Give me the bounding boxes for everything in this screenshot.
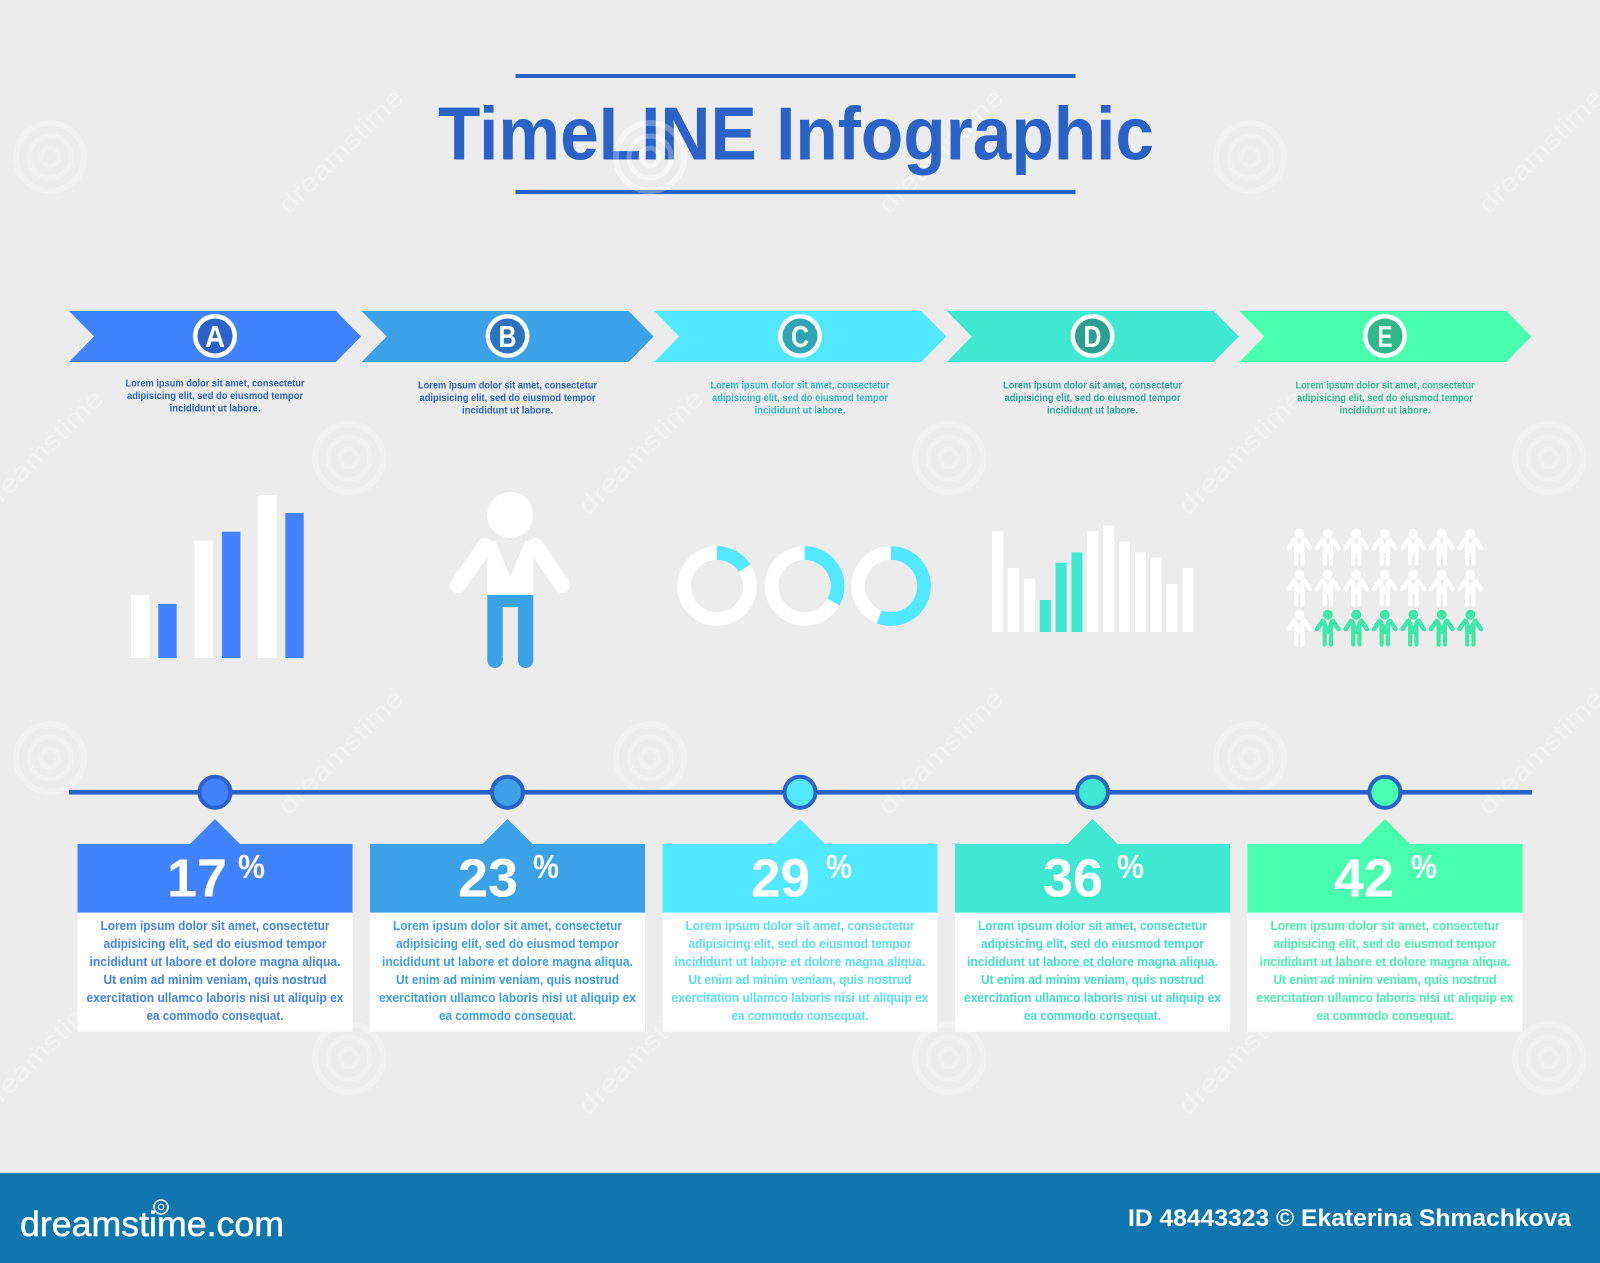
- step B: arrow and caption: incididunt ut labore.: [462, 406, 553, 416]
- panel: 29%: adipisicing elit, sed do eiusmod tempor: [688, 937, 912, 951]
- step A: arrow and caption: adipisicing elit, sed do eiusmod tempor: [127, 391, 303, 402]
- step A: arrow and caption: Lorem ipsum dolor sit amet, consectetur: [126, 378, 305, 390]
- step B: arrow and caption: [362, 311, 654, 416]
- footer logo: dreamstime.com: [20, 1205, 284, 1244]
- watermark pattern: dreamstime: [1472, 82, 1600, 220]
- panel: 29%: incididunt ut labore et dolore magna aliqua.: [674, 955, 926, 969]
- footer bar: [0, 1173, 1600, 1263]
- pictogram grid of people: [1289, 529, 1481, 646]
- panel: 17%: adipisicing elit, sed do eiusmod tempor: [104, 937, 327, 951]
- panel: 17%: %: [238, 848, 265, 885]
- watermark pattern: dreamstime: [872, 683, 1010, 821]
- panel: 23%: incididunt ut labore et dolore magna aliqua.: [382, 955, 633, 969]
- panel: 42%: ea commodo consequat.: [1316, 1009, 1454, 1023]
- step C: arrow and caption: incididunt ut labore.: [754, 406, 846, 416]
- panel: 42%: Lorem ipsum dolor sit amet, consectetur: [1270, 919, 1500, 933]
- panel: 29%: ea commodo consequat.: [732, 1009, 868, 1023]
- icon: person figure: [458, 492, 562, 668]
- panel: 36%: exercitation ullamco laboris nisi ut aliquip ex: [964, 991, 1221, 1005]
- panel: 29%: exercitation ullamco laboris nisi ut aliquip ex: [672, 991, 929, 1005]
- step D: arrow and caption: incididunt ut labore.: [1047, 406, 1138, 416]
- timeline line with nodes: [69, 777, 1532, 808]
- panel: 17%: Lorem ipsum dolor sit amet, consectetur: [100, 919, 330, 933]
- step E: arrow and caption: incididunt ut labore.: [1340, 406, 1431, 416]
- panel: 23%: exercitation ullamco laboris nisi ut aliquip ex: [379, 991, 636, 1005]
- panel: 23%: adipisicing elit, sed do eiusmod tempor: [396, 937, 619, 951]
- step D: arrow and caption: adipisicing elit, sed do eiusmod tempor: [1004, 393, 1181, 404]
- panel: 42%: Ut enim ad minim veniam, quis nostrud: [1274, 973, 1496, 987]
- watermark pattern: dreamstime: [1472, 683, 1600, 821]
- panel: 36%: Lorem ipsum dolor sit amet, consectetur: [978, 919, 1207, 933]
- panel: 36%: [955, 819, 1230, 1032]
- watermark pattern: dreamstime: [572, 983, 710, 1121]
- panel: 29%: %: [826, 848, 852, 885]
- panel: 36%: 36: [1043, 849, 1103, 909]
- panel: 23%: [370, 819, 645, 1032]
- step E: arrow and caption: adipisicing elit, sed do eiusmod tempor: [1297, 393, 1473, 404]
- step B: arrow and caption: Lorem ipsum dolor sit amet, consectetur: [418, 380, 597, 392]
- watermark pattern: dreamstime: [572, 383, 710, 521]
- step C: arrow and caption: [654, 311, 946, 416]
- step D: arrow and caption: D: [1084, 319, 1102, 354]
- donut charts: [684, 553, 924, 619]
- panel: 42%: adipisicing elit, sed do eiusmod tempor: [1274, 937, 1497, 951]
- panel: 36%: incididunt ut labore et dolore magna aliqua.: [967, 955, 1218, 969]
- title: TimeLINE Infographic: [438, 92, 1154, 176]
- title: [438, 74, 1154, 194]
- watermark pattern: dreamstime: [1172, 383, 1310, 521]
- step B: arrow and caption: B: [498, 319, 516, 354]
- panel: 17%: ea commodo consequat.: [146, 1009, 284, 1023]
- step E: arrow and caption: [1239, 311, 1531, 416]
- panel: 29%: 29: [751, 849, 810, 909]
- step A: arrow and caption: A: [205, 319, 225, 354]
- watermark pattern: dreamstime: [872, 82, 1010, 220]
- panel: 36%: Ut enim ad minim veniam, quis nostrud: [981, 973, 1204, 987]
- watermark pattern: dreamstime: [272, 82, 410, 220]
- panel: 23%: 23: [458, 849, 518, 909]
- panel: 36%: adipisicing elit, sed do eiusmod tempor: [981, 937, 1204, 951]
- footer credit: ID 48443323 © Ekaterina Shmachkova: [1128, 1205, 1572, 1232]
- step A: arrow and caption: incididunt ut labore.: [170, 404, 261, 414]
- step C: arrow and caption: C: [791, 319, 809, 354]
- step D: arrow and caption: [947, 311, 1239, 416]
- panel: 17%: Ut enim ad minim veniam, quis nostrud: [104, 973, 326, 987]
- panel: 17%: 17: [167, 849, 227, 909]
- panel: 42%: exercitation ullamco laboris nisi ut aliquip ex: [1256, 991, 1514, 1005]
- panel: 23%: Ut enim ad minim veniam, quis nostrud: [396, 973, 619, 987]
- panel: 23%: %: [533, 848, 559, 885]
- panel: 42%: 42: [1334, 849, 1394, 909]
- panel: 42%: [1248, 819, 1522, 1032]
- panel: 23%: ea commodo consequat.: [439, 1009, 576, 1023]
- step D: arrow and caption: Lorem ipsum dolor sit amet, consectetur: [1003, 380, 1182, 392]
- watermark pattern: dreamstime: [272, 683, 410, 821]
- panel: 36%: %: [1117, 848, 1144, 885]
- step B: arrow and caption: adipisicing elit, sed do eiusmod tempor: [420, 393, 596, 404]
- step E: arrow and caption: Lorem ipsum dolor sit amet, consectetur: [1296, 380, 1475, 392]
- step A: arrow and caption: [69, 311, 361, 414]
- panel: 17%: [78, 819, 352, 1032]
- panel: 29%: [662, 819, 938, 1032]
- step E: arrow and caption: E: [1378, 319, 1392, 354]
- panel: 17%: incididunt ut labore et dolore magna aliqua.: [90, 955, 340, 969]
- panel: 17%: exercitation ullamco laboris nisi ut aliquip ex: [86, 991, 344, 1005]
- bar chart: paired white and blue bars: [131, 495, 304, 658]
- bar chart: thirteen slim bars: [992, 526, 1194, 632]
- panel: 29%: Ut enim ad minim veniam, quis nostrud: [688, 973, 912, 987]
- panel: 23%: Lorem ipsum dolor sit amet, consectetur: [393, 919, 622, 933]
- step C: arrow and caption: adipisicing elit, sed do eiusmod tempor: [712, 393, 888, 404]
- panel: 42%: incididunt ut labore et dolore magna aliqua.: [1260, 955, 1510, 969]
- watermark pattern: dreamstime: [1172, 983, 1310, 1121]
- panel: 29%: Lorem ipsum dolor sit amet, consectetur: [686, 919, 915, 933]
- step C: arrow and caption: Lorem ipsum dolor sit amet, consectetur: [710, 380, 890, 392]
- panel: 36%: ea commodo consequat.: [1024, 1009, 1161, 1023]
- panel: 42%: %: [1411, 848, 1437, 885]
